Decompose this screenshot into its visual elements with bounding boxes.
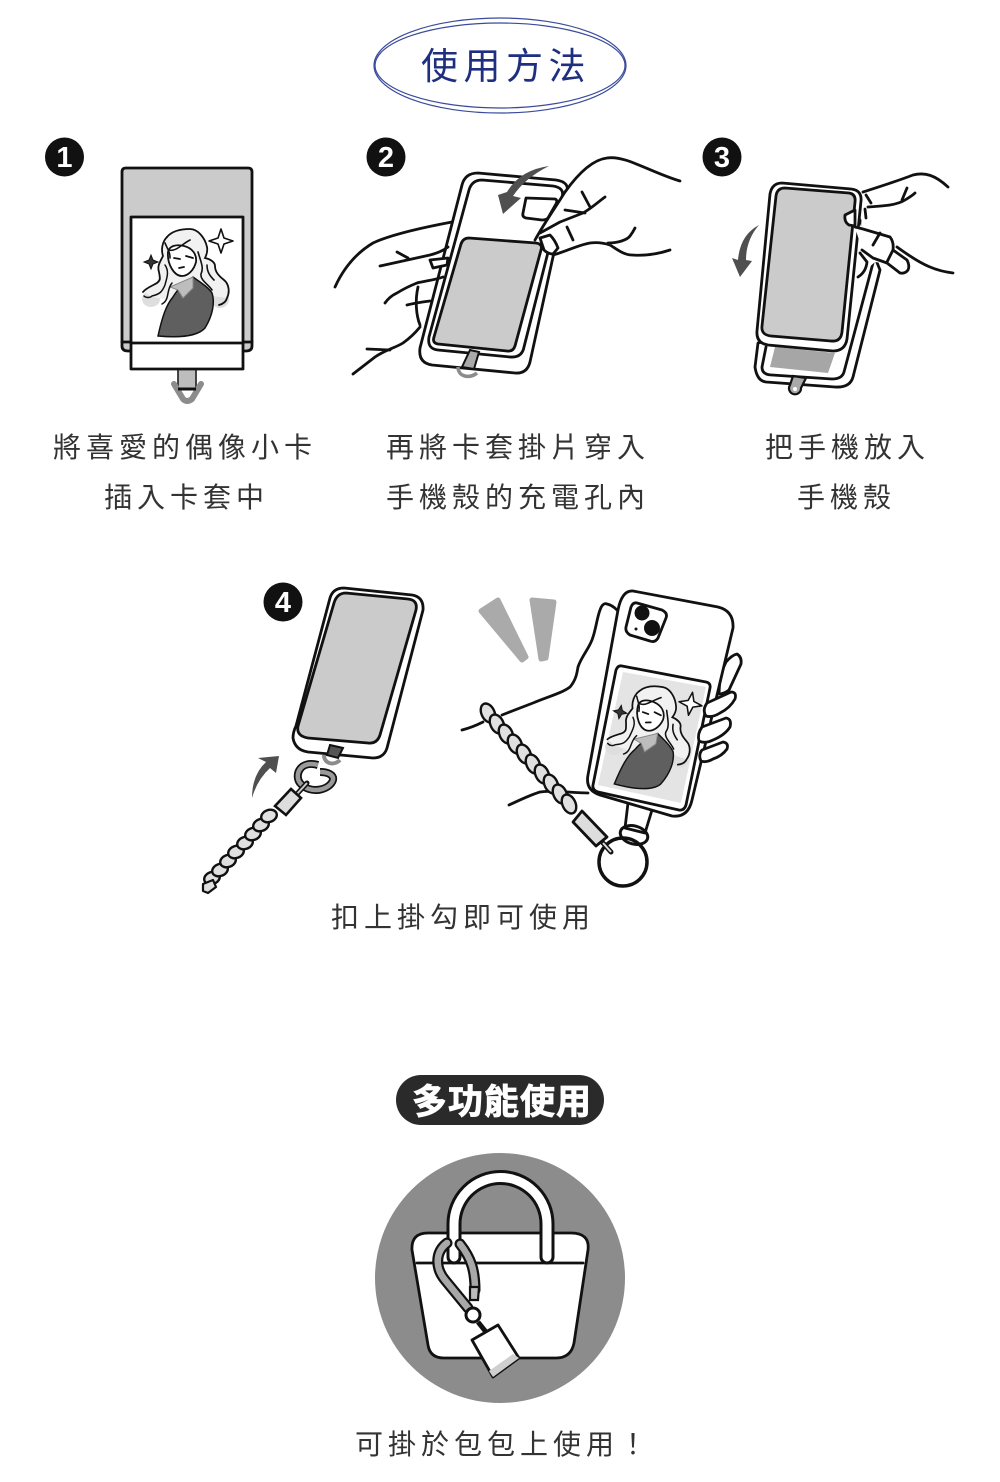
illustration: phone into case: [732, 174, 953, 394]
left hand: [335, 222, 452, 287]
caption: bag use: 可掛於包包上使用！: [355, 1429, 652, 1460]
number badge 3: 3: [714, 142, 730, 174]
caption step 3: 把手機放入: [765, 432, 930, 463]
split ring: [298, 764, 333, 790]
bag body: [412, 1233, 588, 1358]
phone: [757, 183, 861, 351]
caption step 1: 將喜愛的偶像小卡: [53, 432, 317, 463]
number badge 3: [702, 138, 742, 176]
phone: [588, 591, 733, 816]
arrow: [252, 756, 279, 798]
strap piece and rings: [625, 803, 652, 833]
caption step 1: [53, 432, 317, 513]
panel: step 3: [702, 138, 953, 513]
caption step 4: 扣上掛勾即可使用: [331, 902, 595, 933]
caption step 1: 插入卡套中: [104, 482, 269, 513]
strap: [438, 1243, 468, 1308]
hand: [858, 174, 953, 277]
number badge 2: 2: [378, 142, 394, 174]
caption step 2: 手機殼的充電孔內: [386, 482, 650, 513]
clasp: [603, 843, 611, 852]
camera: [626, 603, 666, 642]
motion marks: [481, 600, 554, 660]
ring and card tag: [466, 1308, 480, 1322]
rope and clasp: [296, 783, 307, 795]
caption step 3: [765, 432, 930, 513]
title: [374, 18, 626, 113]
card: [593, 666, 710, 810]
number badge 1: 1: [56, 142, 73, 174]
illustration: phone with clasp: [202, 588, 423, 893]
panel: step 1: [45, 138, 317, 513]
fingers: [704, 692, 736, 717]
panel: step 4 attach: [202, 582, 423, 893]
caption step 3: 手機殼: [797, 482, 896, 513]
arrow: [498, 166, 549, 214]
arrow: [732, 225, 759, 277]
number badge 1: [45, 138, 84, 176]
illustration: case with card and hands: [335, 158, 680, 376]
hand: [502, 604, 617, 715]
caption step 2: 再將卡套掛片穿入: [386, 432, 650, 463]
panel: step 4 result: [331, 591, 741, 933]
number badge 2: [366, 138, 406, 176]
panel: bag illustration: [375, 1153, 625, 1403]
heading: multi-function: 多功能使用: [412, 1074, 592, 1125]
illustration: card pouch: [122, 168, 252, 401]
right hand: [535, 158, 680, 255]
illustration: phone held with strap: [462, 591, 741, 886]
number badge 4: [264, 582, 302, 622]
title: 使用方法: [421, 46, 591, 87]
rope: [478, 701, 498, 725]
number badge 4: 4: [275, 587, 291, 619]
bag handle: [454, 1178, 547, 1257]
caption step 2: [386, 432, 650, 513]
panel: step 2: [335, 138, 680, 513]
